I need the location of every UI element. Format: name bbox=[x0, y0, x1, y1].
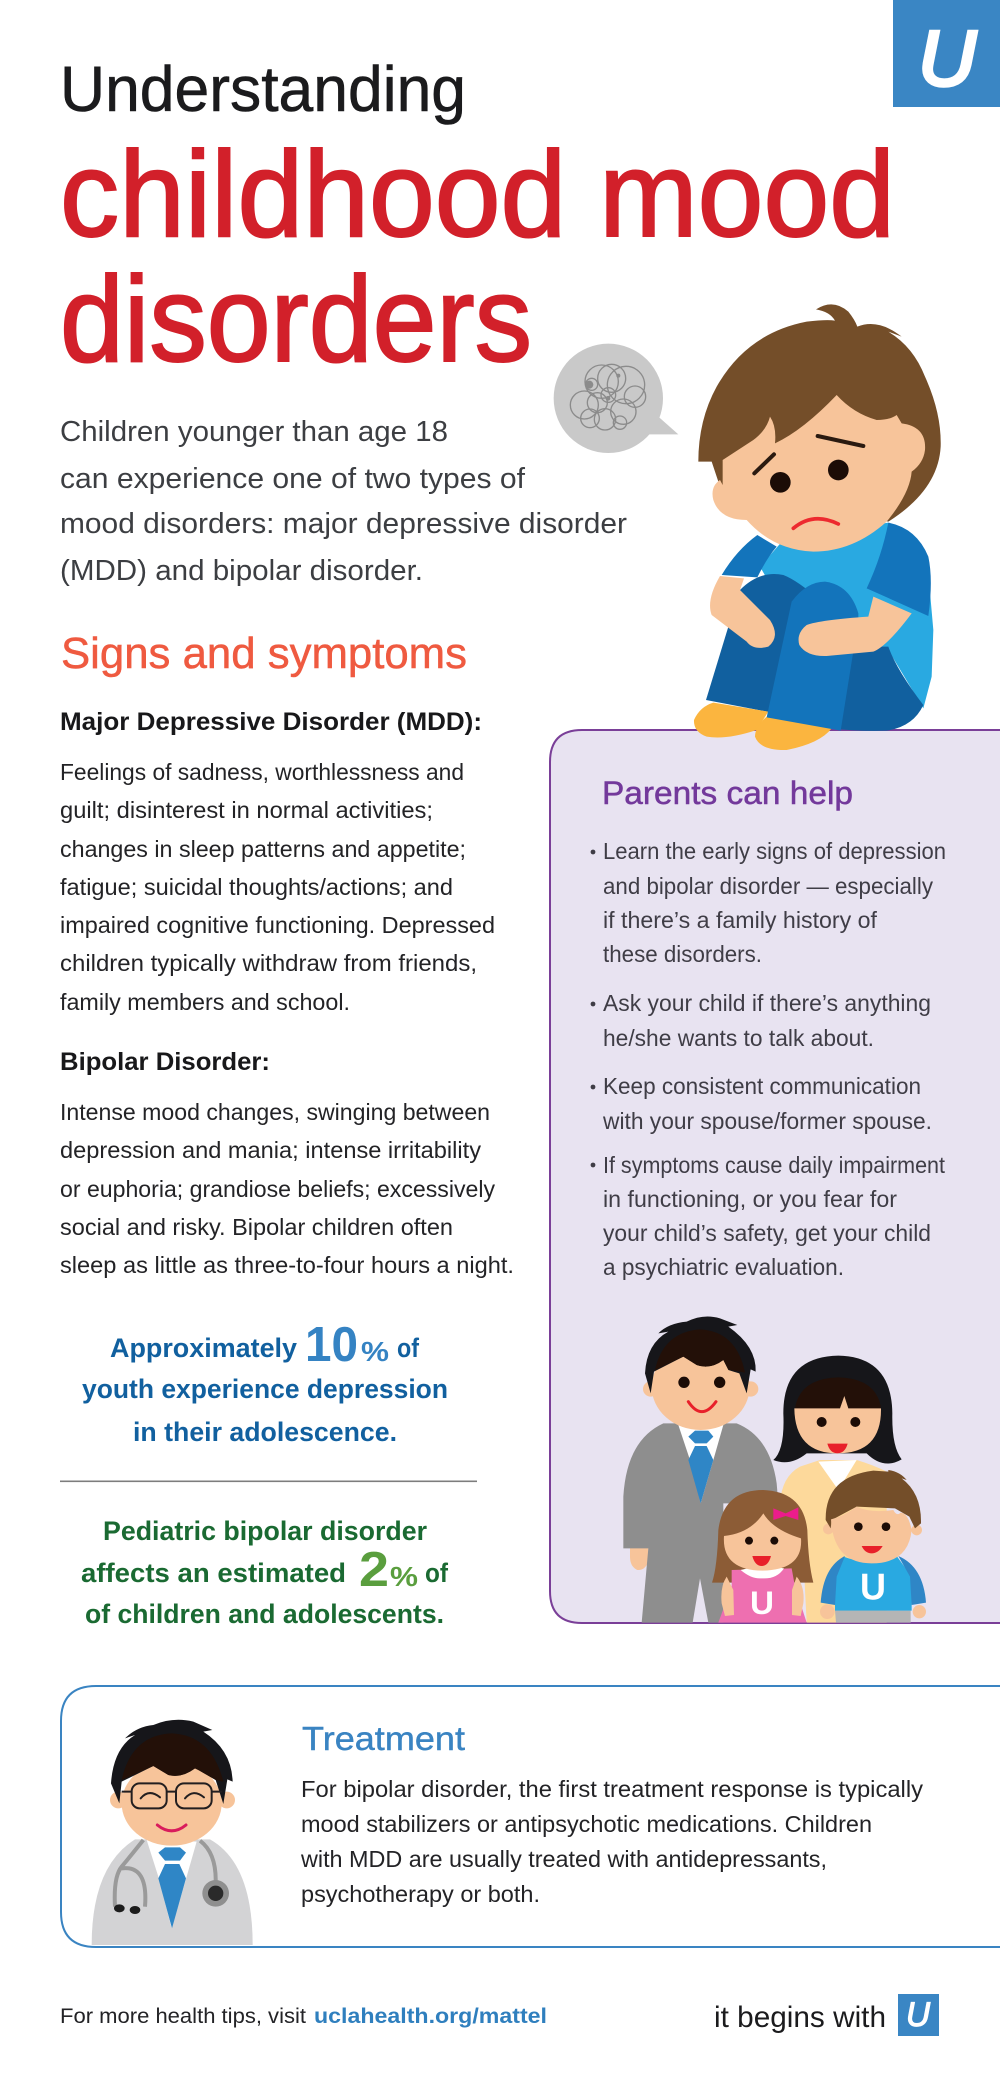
text: bipolar symptoms bbox=[60, 1099, 514, 1278]
callout: 10 percent: in their adolescence. bbox=[133, 1417, 397, 1447]
callout: 10 percent: % bbox=[361, 1336, 389, 1367]
illustration: sad boy bbox=[694, 304, 941, 750]
father bbox=[623, 1316, 778, 1623]
footer: health tips link bbox=[60, 2005, 547, 2028]
bullet list: with your spouse/former spouse. bbox=[602, 1108, 932, 1134]
text: MDD symptoms: children typically withdraw from friends, bbox=[60, 950, 477, 976]
text: bipolar symptoms: depression and mania; intense irritability bbox=[60, 1137, 482, 1163]
callout: 2 percent: Pediatric bipolar disorder bbox=[103, 1516, 427, 1546]
text: MDD symptoms: fatigue; suicidal thoughts/actions; and bbox=[60, 874, 453, 900]
panel: treatment bbox=[61, 1686, 1000, 1947]
mother bbox=[773, 1356, 902, 1623]
callout: 10 percent: youth experience depression bbox=[82, 1374, 448, 1404]
logo: U block bbox=[893, 0, 1000, 107]
callout: 2 percent: affects an estimated bbox=[81, 1558, 346, 1588]
callout: 10 percent: of bbox=[397, 1333, 420, 1363]
callout: 2 percent bbox=[81, 1516, 449, 1629]
text: treatment body: with MDD are usually treated with antidepressants, bbox=[300, 1846, 827, 1872]
intro text: mood disorders: major depressive disorder bbox=[60, 508, 627, 540]
boy: U bbox=[860, 1565, 886, 1607]
panel: parents can help bbox=[550, 730, 1000, 1623]
bullet list: these disorders. bbox=[603, 941, 762, 967]
bullet list: he/she wants to talk about. bbox=[603, 1025, 874, 1051]
title: Understanding bbox=[60, 53, 466, 125]
text: treatment body bbox=[300, 1776, 924, 1907]
title: disorders bbox=[60, 251, 532, 387]
girl bbox=[712, 1490, 813, 1623]
text: MDD symptoms: Feelings of sadness, worthlessness and bbox=[60, 759, 464, 785]
text: treatment body: mood stabilizers or antipsychotic medications. Children bbox=[301, 1811, 872, 1837]
text: treatment body: For bipolar disorder, the first treatment response is typically bbox=[301, 1776, 924, 1802]
callout: 2 percent: of children and adolescents. bbox=[85, 1599, 444, 1629]
heading: parents can help: Parents can help bbox=[602, 775, 853, 811]
text: treatment body: psychotherapy or both. bbox=[301, 1881, 540, 1907]
text: MDD symptoms bbox=[60, 759, 495, 1015]
logo: U block: U bbox=[918, 14, 977, 102]
callout: 2 percent: of bbox=[425, 1558, 449, 1588]
bullet list: your child’s safety, get your child bbox=[603, 1220, 931, 1246]
bullet list: Learn the early signs of depression bbox=[603, 838, 946, 864]
callout: 10 percent: 10 bbox=[305, 1318, 358, 1372]
footer: health tips link: uclahealth.org/mattel bbox=[314, 2005, 547, 2028]
subheading: MDD: Major Depressive Disorder (MDD): bbox=[60, 708, 482, 736]
bullet list: if there’s a family history of bbox=[603, 907, 878, 933]
callout: 2 percent: % bbox=[390, 1561, 418, 1592]
icon: speech bubble with scribble bbox=[554, 344, 678, 453]
bullet list: and bipolar disorder — especially bbox=[603, 873, 933, 899]
footer: health tips link: For more health tips, visit bbox=[60, 2005, 306, 2028]
footer: it begins with U: U bbox=[906, 1996, 930, 2034]
footer: it begins with U: it begins with bbox=[714, 2001, 886, 2034]
text: MDD symptoms: guilt; disinterest in normal activities; bbox=[60, 797, 433, 823]
text: MDD symptoms: changes in sleep patterns and appetite; bbox=[60, 836, 466, 862]
subheading: bipolar: Bipolar Disorder: bbox=[60, 1048, 270, 1076]
title: childhood mood bbox=[60, 126, 895, 262]
illustration: doctor bbox=[92, 1720, 253, 1945]
girl: U bbox=[750, 1585, 774, 1621]
text: bipolar symptoms: social and risky. Bipolar children often bbox=[60, 1214, 453, 1240]
callout: 10 percent bbox=[82, 1318, 448, 1447]
illustration: family bbox=[623, 1316, 926, 1623]
bullet list: Keep consistent communication bbox=[603, 1073, 921, 1099]
text: MDD symptoms: family members and school. bbox=[60, 989, 350, 1015]
callout: 10 percent: Approximately bbox=[110, 1333, 297, 1363]
text: MDD symptoms: impaired cognitive functioning. Depressed bbox=[60, 912, 495, 938]
intro text: can experience one of two types of bbox=[60, 463, 526, 495]
bullet list: If symptoms cause daily impairment bbox=[603, 1152, 946, 1178]
text: bipolar symptoms: or euphoria; grandiose beliefs; excessively bbox=[60, 1176, 496, 1202]
intro text: (MDD) and bipolar disorder. bbox=[60, 555, 423, 587]
intro text: Children younger than age 18 bbox=[60, 416, 448, 448]
bullet list bbox=[591, 838, 946, 1280]
heading: signs and symptoms: Signs and symptoms bbox=[61, 629, 467, 678]
bullet list: a psychiatric evaluation. bbox=[603, 1254, 844, 1280]
title bbox=[60, 53, 895, 387]
callout: 2 percent: 2 bbox=[359, 1543, 389, 1597]
bullet list: in functioning, or you fear for bbox=[603, 1186, 897, 1212]
text: bipolar symptoms: sleep as little as three-to-four hours a night. bbox=[60, 1252, 514, 1278]
text: bipolar symptoms: Intense mood changes, swinging between bbox=[60, 1099, 490, 1125]
footer: it begins with U bbox=[714, 1994, 939, 2036]
boy bbox=[820, 1470, 926, 1623]
heading: treatment: Treatment bbox=[302, 1720, 465, 1757]
intro text bbox=[60, 416, 627, 587]
bullet list: Ask your child if there’s anything bbox=[603, 990, 931, 1016]
